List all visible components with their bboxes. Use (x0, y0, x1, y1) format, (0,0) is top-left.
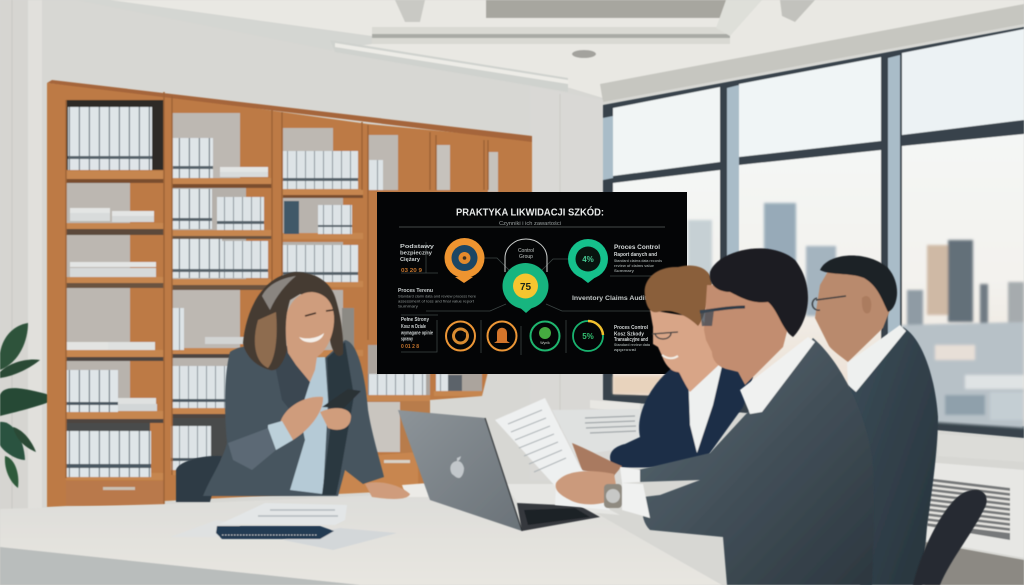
bottom right text block: Kosz Szkody (614, 332, 645, 338)
middle left text block: Standard claim data and review process here (398, 294, 476, 298)
person: man with navy suit and curly hair (572, 266, 753, 478)
top left text block: 03 20 9 (401, 268, 422, 274)
top right text block: Standard claims data records (614, 259, 662, 263)
middle left text block: Summary (398, 304, 418, 308)
table (0, 483, 722, 585)
arch label (505, 239, 547, 272)
laptop (398, 410, 600, 531)
orange target gauge (444, 238, 484, 283)
top right green gauge (568, 239, 608, 283)
top right green gauge: 4% (582, 255, 594, 264)
bottom left text block: Pełne Strony (401, 317, 430, 323)
arch label: Control (518, 248, 534, 254)
green ring icon: Wynik (540, 341, 550, 345)
middle left text block (398, 288, 476, 308)
top left text block: bezpieczny (400, 250, 433, 256)
bottom left text block: Kosz w Dziale (401, 324, 426, 330)
person: man in foreground with glasses (556, 248, 874, 585)
chair behind woman (176, 456, 222, 502)
window with city view (590, 27, 1024, 462)
wall screen infographic (377, 192, 687, 374)
central green gauge (502, 263, 548, 313)
bottom left text block: wymagane opinie (400, 330, 433, 336)
bottom left text block: sprawy (401, 336, 414, 342)
bottom right text block (614, 325, 650, 352)
screen subtitle: Czynniki i ich zawartości (499, 221, 561, 227)
office chair right (913, 490, 987, 585)
top right text block: Proces Control (614, 245, 660, 251)
bottom left text block: 0 01 2 8 (401, 344, 419, 350)
orange ring icon (446, 322, 475, 350)
central green gauge: 75 (520, 282, 531, 293)
air conditioning unit (925, 462, 1024, 585)
top left text block: Ciężary (400, 257, 421, 263)
green and yellow gauge (573, 321, 603, 351)
bottom right text block: Proces Control (614, 325, 648, 331)
bookshelf with binders (47, 80, 532, 507)
middle left text block: Proces Terenu (398, 288, 433, 294)
papers and notebook on table (170, 503, 397, 550)
green ring icon (530, 322, 560, 350)
document behind paper (552, 409, 642, 455)
person: man at window in grey suit (812, 255, 938, 585)
top right text block: Summary (614, 269, 634, 273)
top right text block (614, 245, 662, 273)
bottom right text block: approval (614, 348, 636, 352)
top right text block: Raport danych and (614, 252, 657, 258)
top left text block: Podstawy (400, 244, 435, 250)
middle left text block: assessment of loss and final value report (398, 300, 474, 304)
bottom left text block (400, 317, 433, 350)
bottom right text block: Standard review data (614, 343, 650, 347)
bottom right text block: Transakcyjne and (614, 337, 648, 343)
middle right label: Inventory Claims Audit (572, 296, 647, 302)
screen title: PRAKTYKA LIKWIDACJI SZKÓD: (456, 206, 604, 218)
paper held by man (495, 398, 610, 510)
arch label: Group (519, 254, 533, 260)
orange bell icon (488, 322, 516, 350)
plant (0, 323, 60, 488)
icon: apple logo (450, 456, 464, 478)
green and yellow gauge: 5% (582, 332, 594, 341)
top right text block: review of claims value (614, 264, 654, 268)
top left text block (400, 244, 435, 274)
person: woman with phone (203, 272, 410, 499)
